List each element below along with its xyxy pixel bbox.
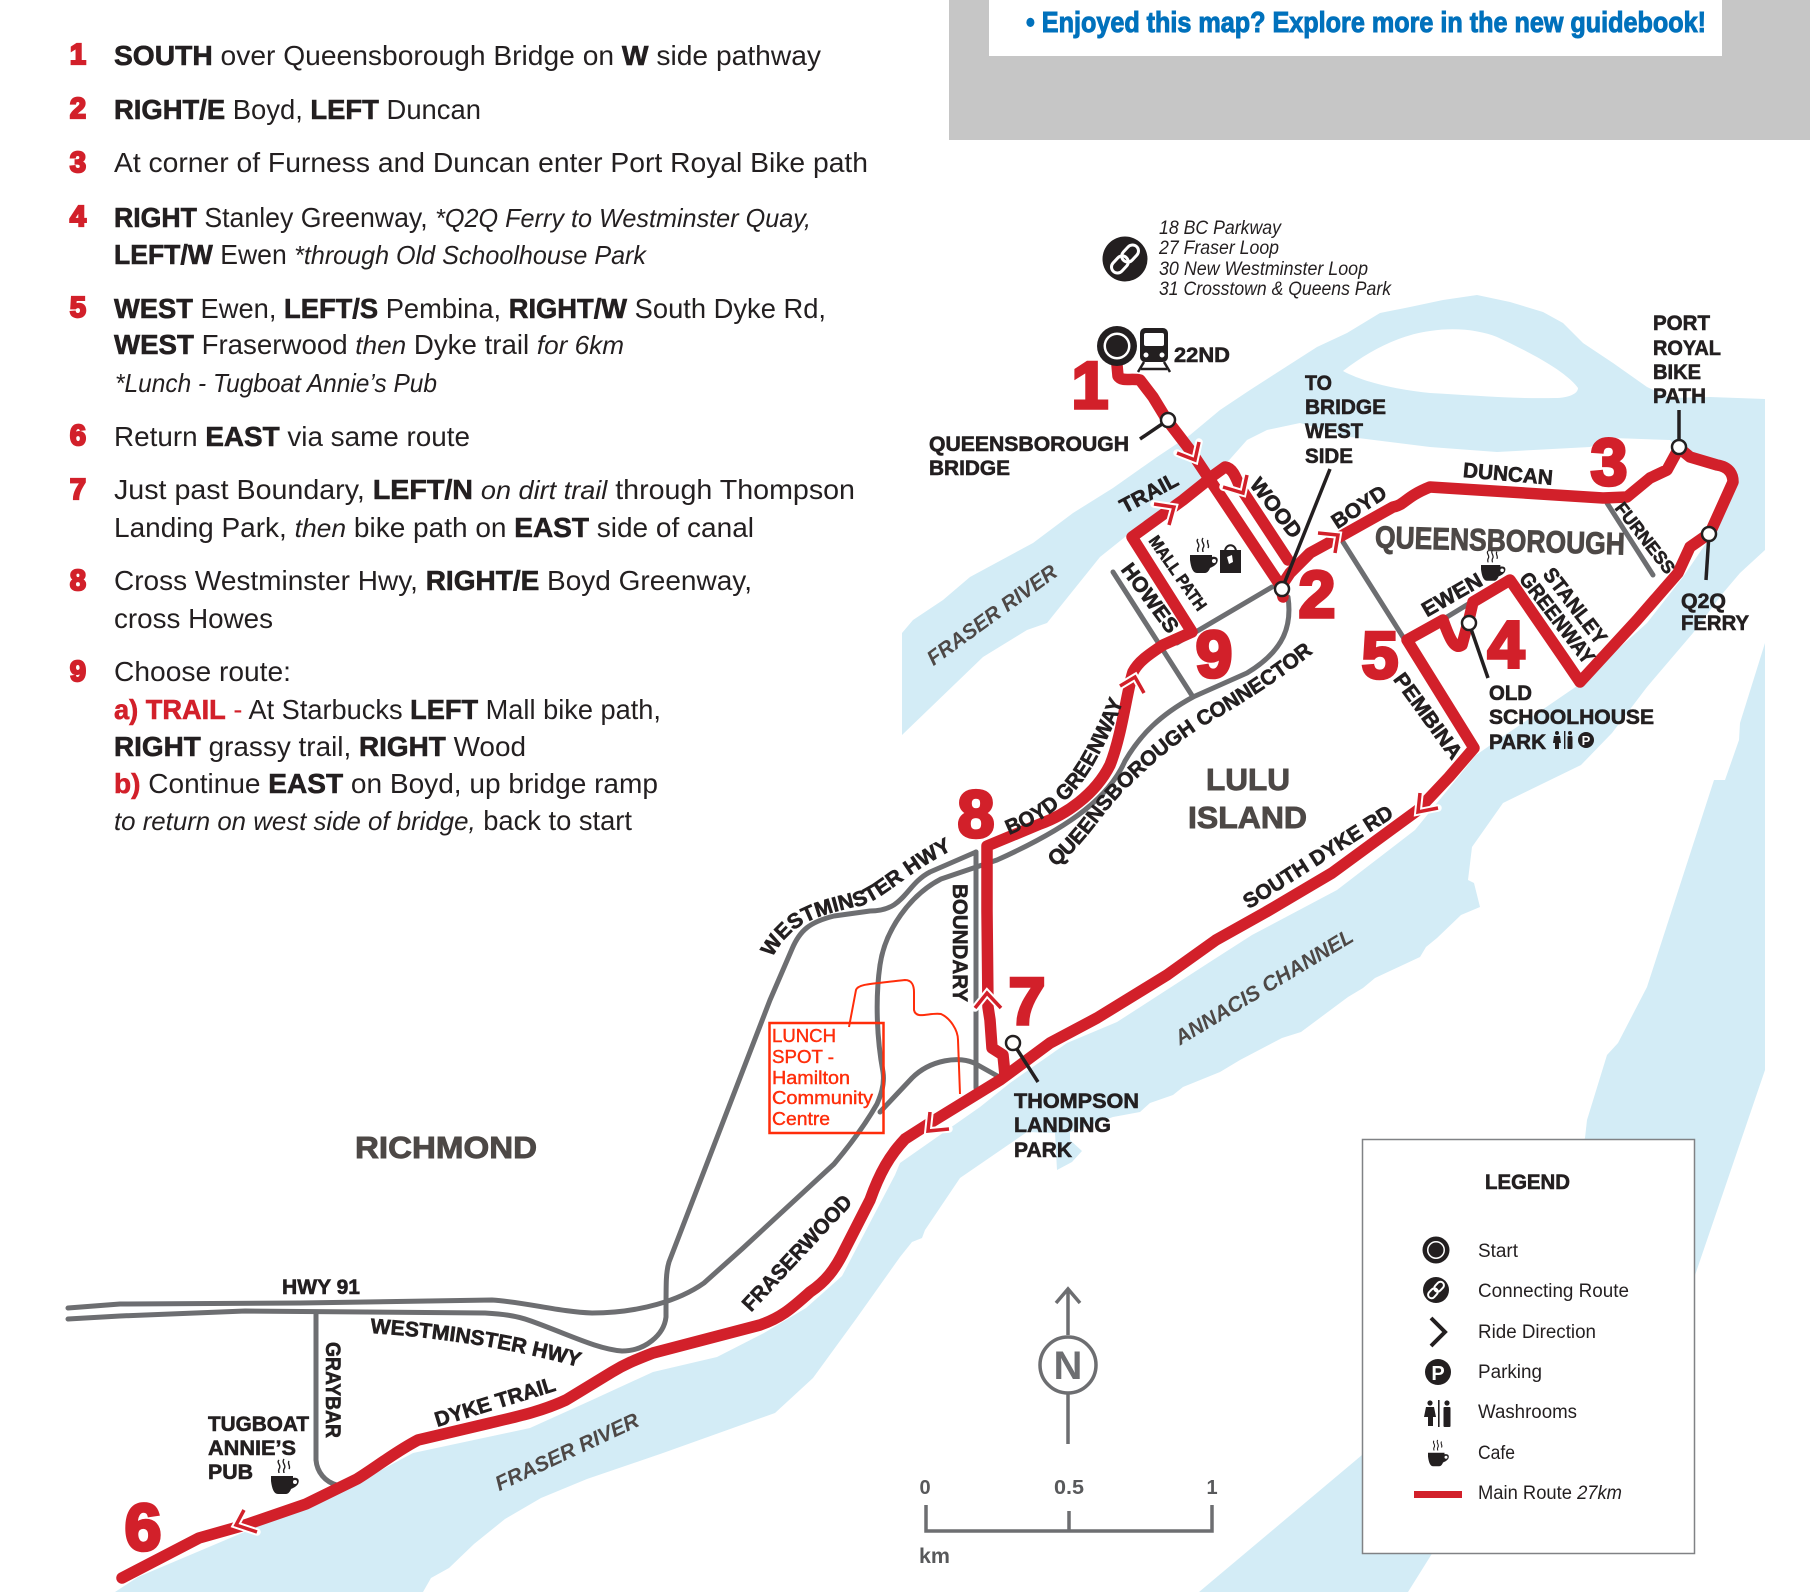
lunch spot callout: LUNCH — [772, 1026, 836, 1046]
step 9: a) TRAIL - At Starbucks LEFT Mall bike path, — [114, 694, 661, 725]
place labels: 22ND — [1174, 344, 1230, 367]
step 9 — [70, 656, 661, 836]
step 7: Just past Boundary, LEFT/N on dirt trail through Thompson — [114, 474, 855, 505]
legend: parking — [1425, 1359, 1542, 1385]
legend: cafe — [1428, 1440, 1515, 1466]
street labels: BOYD GREENWAY — [1004, 696, 1122, 835]
legend: connecting route — [1423, 1277, 1629, 1303]
scale bar: 0.5 — [1054, 1477, 1084, 1499]
step 9: b) Continue EAST on Boyd, up bridge ramp — [114, 768, 658, 799]
place labels: ANNIE’S — [208, 1437, 296, 1460]
icon: cafe at mall — [1190, 538, 1218, 573]
connecting bus routes list: 18 BC Parkway — [1159, 217, 1282, 239]
route step numbers on map: 3 — [1591, 425, 1627, 499]
street labels: TRAIL — [1116, 468, 1183, 518]
icon: cafe at Tugboat Annie's — [271, 1459, 299, 1494]
step 4: LEFT/W Ewen *through Old Schoolhouse Park — [114, 239, 648, 270]
land: island in river — [1343, 329, 1578, 398]
street labels: GRAYBAR — [321, 1342, 344, 1438]
route step numbers on map: 2 — [1299, 557, 1335, 631]
place labels: QUEENSBOROUGH — [1375, 520, 1625, 561]
route step numbers on map: 1 — [1072, 348, 1108, 422]
place labels: PORT — [1653, 312, 1710, 335]
lunch spot callout — [770, 980, 960, 1133]
lunch spot callout: Community — [772, 1088, 873, 1108]
step 7 — [70, 474, 855, 543]
street labels: QUEENSBOROUGH CONNECTOR — [1049, 644, 1314, 864]
street labels: DYKE TRAIL — [432, 1373, 558, 1432]
connecting bus routes list: 30 New Westminster Loop — [1159, 258, 1368, 280]
scale bar: km — [919, 1545, 950, 1568]
panel: guidebook banner — [949, 0, 1810, 140]
place labels: PARK — [1489, 731, 1546, 754]
route step numbers on map: 4 — [1488, 607, 1525, 681]
place labels: THOMPSON — [1014, 1090, 1139, 1113]
place labels: BRIDGE — [1305, 396, 1386, 419]
place labels: LANDING — [1014, 1114, 1111, 1137]
place labels: PARK — [1014, 1139, 1072, 1162]
street labels: EWEN — [1418, 569, 1487, 622]
legend heading: LEGEND — [1485, 1171, 1570, 1194]
place labels: HWY 91 — [282, 1276, 360, 1299]
street labels: PEMBINA — [1389, 669, 1467, 764]
step 9: to return on west side of bridge, back to start — [114, 805, 632, 836]
icon: connecting route chain — [1102, 236, 1148, 282]
place labels: TUGBOAT — [208, 1413, 309, 1436]
step 5: WEST Ewen, LEFT/S Pembina, RIGHT/W South Dyke Rd, — [114, 293, 826, 324]
place labels: ROYAL — [1653, 337, 1721, 360]
place labels: PUB — [208, 1461, 253, 1484]
legend: connecting route: Connecting Route — [1478, 1281, 1629, 1302]
place labels: FERRY — [1681, 612, 1749, 635]
place labels: PATH — [1653, 385, 1706, 408]
icon: train — [1138, 328, 1170, 372]
step 8: cross Howes — [114, 603, 273, 634]
step 9: Choose route: — [114, 656, 291, 687]
step 8: Cross Westminster Hwy, RIGHT/E Boyd Greenway, — [114, 565, 752, 596]
legend: parking: Parking — [1478, 1362, 1542, 1383]
step 8: 8 — [70, 565, 86, 597]
legend: ride direction: Ride Direction — [1478, 1322, 1596, 1343]
route step numbers on map: 8 — [958, 777, 994, 851]
leader lines and location markers — [1006, 410, 1716, 1082]
main route red line — [122, 365, 1733, 1578]
route step numbers on map: 9 — [1196, 617, 1232, 691]
step 8 — [70, 565, 752, 634]
lunch spot callout: SPOT - — [772, 1047, 834, 1067]
place labels: RICHMOND — [355, 1130, 537, 1165]
place labels: WEST — [1305, 420, 1363, 443]
street labels: WOOD — [1245, 474, 1306, 543]
step 9: 9 — [70, 656, 86, 688]
step 4 — [70, 201, 811, 270]
street labels: HOWES — [1116, 559, 1183, 638]
step 6: Return EAST via same route — [114, 421, 470, 452]
place labels: BIKE — [1653, 361, 1701, 384]
place labels: LULU — [1206, 762, 1290, 797]
connecting bus routes list — [1158, 217, 1392, 300]
legend: main route: Main Route 27km — [1478, 1483, 1622, 1504]
street labels: FURNESS — [1611, 498, 1679, 578]
street labels: DUNCAN — [1462, 459, 1554, 490]
place labels: ISLAND — [1188, 800, 1307, 835]
legend: start: Start — [1478, 1241, 1519, 1262]
step 1: 1 — [70, 39, 86, 71]
step 2: RIGHT/E Boyd, LEFT Duncan — [114, 94, 481, 125]
legend: washrooms — [1424, 1400, 1577, 1427]
step 4: 4 — [70, 201, 86, 233]
scale bar: 1 — [1206, 1477, 1218, 1499]
place labels: OLD — [1489, 682, 1532, 705]
street labels: WESTMINSTER HWY — [759, 836, 948, 955]
water labels — [492, 560, 1358, 1496]
legend: washrooms: Washrooms — [1478, 1402, 1577, 1423]
street labels: MALL PATH — [1145, 532, 1210, 614]
water: eastern channel — [1199, 643, 1765, 1592]
connecting bus routes list: 27 Fraser Loop — [1158, 237, 1279, 259]
connecting bus routes list: 31 Crosstown & Queens Park — [1159, 278, 1392, 300]
street labels: BOUNDARY — [948, 884, 971, 1002]
water labels: ANNACIS CHANNEL — [1170, 925, 1358, 1050]
street labels — [321, 459, 1679, 1438]
water labels: FRASER RIVER — [923, 560, 1062, 670]
icon: shopping bag — [1220, 545, 1241, 573]
scale bar — [919, 1477, 1218, 1568]
step 2: 2 — [70, 93, 86, 125]
place labels: SIDE — [1305, 445, 1353, 468]
step 4: RIGHT Stanley Greenway, *Q2Q Ferry to Westminster Quay, — [114, 202, 811, 233]
step 6: 6 — [70, 420, 86, 452]
icon: start marker — [1097, 326, 1137, 366]
street labels: GREENWAY — [1514, 568, 1599, 669]
step 3: At corner of Furness and Duncan enter Port Royal Bike path — [114, 147, 868, 178]
place labels: Q2Q — [1681, 590, 1726, 613]
street labels: FRASERWOOD — [738, 1191, 857, 1316]
north arrow — [1040, 1289, 1096, 1444]
panel: legend — [1362, 1140, 1694, 1554]
directions list — [70, 39, 868, 836]
legend: parking: P — [1431, 1363, 1445, 1385]
place labels: QUEENSBOROUGH — [929, 433, 1129, 456]
step 7: Landing Park, then bike path on EAST side of canal — [114, 512, 754, 543]
panel: guidebook banner: • Enjoyed this map? Explore more in the new guidebook! — [1026, 7, 1706, 39]
step 1: SOUTH over Queensborough Bridge on W side pathway — [114, 40, 821, 71]
water labels: FRASER RIVER — [492, 1409, 644, 1496]
route step numbers on map — [125, 348, 1627, 1564]
street labels: BOYD — [1327, 481, 1391, 534]
legend: ride direction — [1431, 1318, 1596, 1346]
water: Fraser River and Annacis Channel — [115, 295, 1765, 1592]
route step numbers on map: 7 — [1009, 964, 1045, 1038]
scale bar: 0 — [919, 1477, 931, 1499]
step 5: WEST Fraserwood then Dyke trail for 6km — [114, 329, 624, 360]
icon: park washrooms and parking: P — [1582, 733, 1591, 748]
street labels: SOUTH DYKE RD — [1239, 801, 1397, 914]
route step numbers on map: 6 — [125, 1490, 161, 1564]
street labels: WESTMINSTER HWY — [370, 1318, 583, 1366]
place labels: SCHOOLHOUSE — [1489, 706, 1654, 729]
legend: main route — [1414, 1483, 1622, 1504]
street labels: STANLEY — [1538, 564, 1611, 649]
place labels: BRIDGE — [929, 457, 1010, 480]
place labels — [208, 312, 1749, 1484]
step 5 — [70, 292, 826, 398]
icon: cafe on Ewen — [1481, 550, 1505, 581]
lunch spot callout: Hamilton — [772, 1068, 850, 1088]
step 5: 5 — [70, 292, 86, 324]
place labels: TO — [1305, 372, 1332, 395]
route step numbers on map: 5 — [1362, 618, 1398, 692]
legend: cafe: Cafe — [1478, 1443, 1515, 1464]
icon: park washrooms and parking — [1553, 731, 1594, 749]
lunch spot callout: Centre — [772, 1109, 830, 1129]
step 9: RIGHT grassy trail, RIGHT Wood — [114, 731, 526, 762]
step 3: 3 — [70, 147, 86, 179]
legend: start — [1422, 1236, 1519, 1264]
north arrow: N — [1054, 1344, 1082, 1388]
step 5: *Lunch - Tugboat Annie’s Pub — [115, 368, 437, 398]
ride direction arrows — [236, 442, 1438, 1532]
roads network — [68, 503, 1653, 1485]
step 7: 7 — [70, 474, 86, 506]
